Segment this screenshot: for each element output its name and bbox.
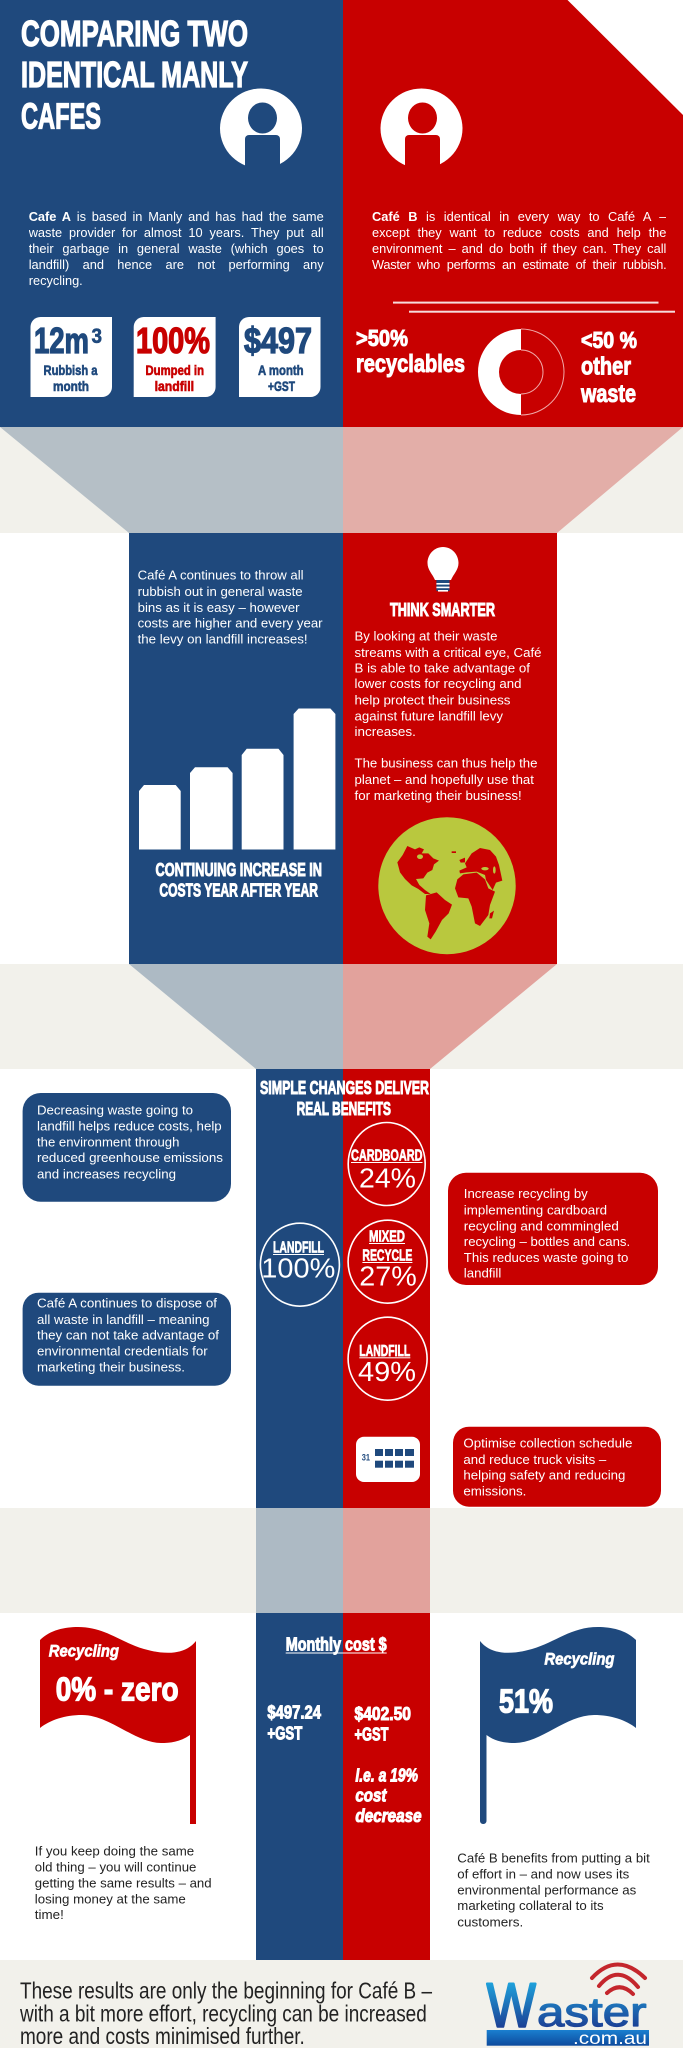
circle: landfill 100%: 100% <box>261 1252 335 1283</box>
text: Cafe B benefits: customers. <box>457 1914 523 1929</box>
text: Cafe A continues: costs are higher and every year <box>138 616 323 630</box>
label: recyclables share <box>356 325 465 378</box>
callout: Cafe A landfill: marketing their business. <box>37 1359 185 1374</box>
bar chart: rising costs <box>139 708 335 850</box>
text: Cafe B benefits: of effort in – and now uses its <box>457 1867 630 1882</box>
callout: Cafe A landfill: they can not take advantage of <box>37 1328 219 1343</box>
text: closing statement: with a bit more effort, recycling can be increased <box>19 2001 427 2027</box>
circle: cardboard 24% <box>348 1122 425 1206</box>
circle: landfill 49%: LANDFILL <box>359 1343 410 1360</box>
text: Cafe B explanation: against future landfill levy <box>354 708 503 723</box>
funnel: second narrowing <box>129 964 557 1069</box>
heading: simple changes <box>260 1077 429 1119</box>
icon: calendar <box>356 1437 420 1482</box>
flag: Cafe B recycling 51%: 51% <box>499 1682 553 1719</box>
heading: simple changes: REAL BENEFITS <box>297 1098 391 1119</box>
callout: increase recycling: landfill <box>464 1266 501 1281</box>
text: Cafe B explanation: The business can thus help the <box>354 756 538 771</box>
callout: decreasing waste <box>23 1093 231 1202</box>
callout: optimise collection: emissions. <box>463 1483 526 1498</box>
title: CAFES <box>21 96 101 136</box>
callout: increase recycling: implementing cardboard <box>464 1203 607 1218</box>
text: Cafe B description: Waster who performs an estimate of their rubbish. <box>372 257 666 272</box>
stat card: 12m3 rubbish: 3 <box>92 325 102 348</box>
panel: monthly cost column <box>256 1613 430 1960</box>
icon: person Cafe B <box>380 88 462 175</box>
text: 19% cost decrease: cost <box>355 1785 387 1806</box>
text: 19% cost decrease: decrease <box>355 1805 422 1826</box>
circle: mixed recycle 27%: 27% <box>359 1260 417 1291</box>
callout: Cafe A landfill: all waste in landfill – meaning <box>37 1312 210 1327</box>
text: Cafe B explanation: planet – and hopefully use that <box>354 772 534 787</box>
stat card: 100% landfill: Dumped in <box>146 362 204 378</box>
stat card: 12m3 rubbish: 12m <box>34 320 89 361</box>
icon: calendar: 31 <box>362 1453 370 1463</box>
callout: increase recycling: Increase recycling by <box>464 1186 588 1201</box>
circle: landfill 100%: LANDFILL <box>273 1240 324 1257</box>
text: Cafe B benefits: environmental performance as <box>457 1882 637 1897</box>
text: Cafe A description: their garbage in general waste (which goes to <box>29 241 324 256</box>
stat card: 100% landfill <box>134 317 216 397</box>
circle: landfill 49% <box>348 1317 427 1400</box>
stat card: $497 a month: +GST <box>268 378 295 394</box>
label: other waste share: waste <box>580 380 636 408</box>
text: Cafe B description <box>372 209 666 275</box>
title <box>21 13 248 136</box>
icon: globe <box>378 817 516 954</box>
text: Cafe A continues <box>138 568 323 646</box>
text: keep doing the same <box>35 1843 212 1922</box>
caption: continuing increase: COSTS YEAR AFTER YEAR <box>159 880 318 900</box>
icon: light bulb <box>428 547 458 592</box>
panel: beige funnel bands <box>0 427 683 2048</box>
text: Cafe B explanation: increases. <box>354 724 416 739</box>
callout: optimise collection: Optimise collection schedule <box>463 1436 632 1451</box>
funnel: straight connector <box>256 1508 430 1613</box>
text: keep doing the same: getting the same results – and <box>35 1875 212 1890</box>
text: Cafe A monthly cost: $497.24 <box>267 1702 321 1722</box>
text: Cafe B benefits <box>457 1850 650 1929</box>
heading: think smarter: THINK SMARTER <box>390 599 495 620</box>
callout: increase recycling <box>448 1173 658 1285</box>
flag: Cafe B recycling 51% <box>480 1627 636 1824</box>
stat card: $497 a month <box>239 317 320 397</box>
icon: wifi arcs <box>592 1964 645 1994</box>
label: other waste share: other <box>581 353 631 381</box>
text: keep doing the same: losing money at the same <box>35 1891 186 1906</box>
panel: Cafe A introduction <box>0 0 343 427</box>
panel: Cafe B think smarter <box>343 533 557 964</box>
text: Cafe A description: recycling. <box>29 273 83 288</box>
callout: Cafe A landfill <box>23 1293 231 1386</box>
funnel: first narrowing <box>0 427 683 533</box>
stat card: $497 a month: $497 <box>244 320 312 361</box>
logo: Waster.com.au: W <box>487 1972 536 2040</box>
callout: decreasing waste: landfill helps reduce costs, help <box>37 1119 222 1134</box>
circle: mixed recycle 27% <box>348 1220 427 1303</box>
callout: optimise collection <box>453 1427 661 1507</box>
text: Cafe B monthly cost: $402.50 <box>354 1704 411 1724</box>
callout: increase recycling: recycling – bottles and cans. <box>464 1234 630 1249</box>
chart: donut 50/50 <box>478 329 564 415</box>
circle: landfill 49%: 49% <box>358 1356 416 1387</box>
text: keep doing the same: old thing – you will continue <box>35 1860 196 1875</box>
stat card: 100% landfill: landfill <box>155 378 194 394</box>
text: Cafe B description: Café B is identical in every way to Café A – <box>372 209 666 224</box>
text: closing statement <box>19 1977 432 2048</box>
text: Cafe A monthly cost: +GST <box>267 1723 302 1743</box>
flag: Cafe A recycling zero: Recycling <box>49 1642 120 1661</box>
callout: decreasing waste: and increases recycling <box>37 1166 176 1181</box>
panel: Cafe A costs <box>129 533 343 964</box>
callout: decreasing waste: reduced greenhouse emissions <box>37 1150 224 1165</box>
callout: decreasing waste: the environment through <box>37 1134 179 1149</box>
flag: Cafe A recycling zero <box>40 1627 196 1824</box>
title: COMPARING TWO <box>21 13 248 54</box>
text: Cafe B monthly cost: +GST <box>354 1725 389 1745</box>
text: Cafe A continues: the levy on landfill increases! <box>138 632 308 646</box>
heading: simple changes: SIMPLE CHANGES DELIVER <box>260 1077 429 1098</box>
title: IDENTICAL MANLY <box>21 54 248 95</box>
text: Cafe B benefits: Café B benefits from putting a bit <box>457 1850 650 1865</box>
label: recyclables share: >50% <box>356 325 408 351</box>
text: Cafe A description: landfill) and hence are not performing any <box>29 257 324 272</box>
caption: continuing increase <box>156 859 322 900</box>
callout: Cafe A landfill: Café A continues to dispose of <box>37 1296 217 1311</box>
text: closing statement: These results are only the beginning for Café B – <box>20 1977 432 2003</box>
text: Cafe B explanation: streams with a critical eye, Café <box>354 645 542 660</box>
text: Cafe A description: waste provider for almost 10 years. They put all <box>29 225 324 240</box>
callout: increase recycling: This reduces waste going to <box>464 1250 628 1265</box>
text: Cafe B explanation <box>354 628 542 803</box>
text: Cafe B explanation: help protect their business <box>354 692 511 707</box>
icon: person Cafe A <box>220 88 302 175</box>
text: Cafe B monthly cost <box>354 1704 411 1745</box>
text: 19% cost decrease <box>355 1764 422 1826</box>
text: Cafe B description: environment – and do both if they can. They call <box>372 241 666 256</box>
text: Cafe A continues: rubbish out in general waste <box>138 584 303 599</box>
stat card: $497 a month: A month <box>258 362 304 378</box>
text: Cafe B explanation: By looking at their waste <box>354 628 498 644</box>
callout: optimise collection: and reduce truck visits – <box>463 1452 607 1467</box>
text: Cafe A description <box>29 209 324 291</box>
callout: decreasing waste: Decreasing waste going to <box>37 1102 193 1117</box>
stat card: 12m3 rubbish <box>30 317 112 397</box>
text: Cafe A continues: bins as it is easy – however <box>138 600 300 615</box>
text: Cafe B explanation: for marketing their business! <box>354 788 522 803</box>
text: Cafe A continues: Café A continues to throw all <box>138 568 304 583</box>
panel: simple changes column <box>256 1069 430 1508</box>
circle: cardboard 24%: CARDBOARD <box>351 1148 422 1165</box>
logo: Waster.com.au: aster <box>537 1989 646 2035</box>
heading: monthly cost: Monthly cost $ <box>286 1634 387 1655</box>
label: other waste share: <50 % <box>581 327 637 353</box>
label: recyclables share: recyclables <box>356 350 465 378</box>
circle: mixed recycle 27%: MIXED <box>369 1229 405 1246</box>
logo: Waster.com.au <box>487 1964 649 2048</box>
text: Cafe B explanation: B is able to take advantage of <box>354 661 530 676</box>
stat card: 100% landfill: 100% <box>136 320 210 361</box>
text: Cafe B benefits: marketing collateral to its <box>457 1898 604 1913</box>
text: Cafe B explanation: lower costs for recycling and <box>354 676 522 691</box>
stat card: 12m3 rubbish: Rubbish a <box>44 362 98 378</box>
text: keep doing the same: If you keep doing the same <box>35 1843 194 1858</box>
text: Cafe B description: except they want to reduce costs and help the <box>372 225 666 240</box>
callout: increase recycling: recycling and commingled <box>464 1218 619 1233</box>
circle: cardboard 24%: 24% <box>359 1162 416 1193</box>
text: 19% cost decrease: I.e. a 19% <box>355 1764 418 1785</box>
panel: Cafe B introduction <box>343 0 683 427</box>
flag: Cafe B recycling 51%: Recycling <box>544 1649 615 1668</box>
label: other waste share <box>580 327 637 408</box>
text: Cafe A description: Cafe A is based in Manly and has had the same <box>29 209 324 224</box>
circle: mixed recycle 27%: RECYCLE <box>362 1248 413 1265</box>
stat card: 12m3 rubbish: month <box>53 378 89 394</box>
circle: landfill 100% <box>260 1223 339 1306</box>
logo: Waster.com.au: .com.au <box>573 2028 647 2048</box>
caption: continuing increase: CONTINUING INCREASE IN <box>156 859 322 880</box>
flag: Cafe A recycling zero: 0% - zero <box>56 1671 179 1708</box>
callout: Cafe A landfill: environmental credentials for <box>37 1343 208 1358</box>
text: keep doing the same: time! <box>35 1907 64 1922</box>
text: Cafe A monthly cost <box>267 1702 321 1743</box>
callout: optimise collection: helping safety and reducing <box>463 1468 625 1483</box>
